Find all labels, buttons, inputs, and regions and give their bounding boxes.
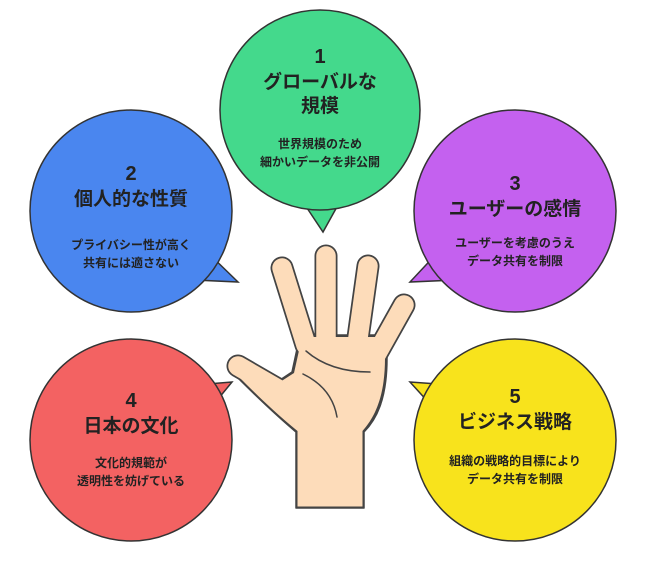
- bubble 4: Japanese culture: [30, 339, 232, 541]
- bubble 3: user sentiment: [410, 110, 616, 312]
- bubble 4: Japanese culture: 日本の文化: [83, 415, 179, 437]
- bubble 4: Japanese culture: 透明性を妨げている: [77, 473, 185, 488]
- icon: hand: [236, 256, 404, 508]
- bubble 1: global scale: グローバルな: [263, 70, 377, 93]
- bubble 2: personal nature: 2: [125, 163, 137, 185]
- bubble 5: business strategy: [410, 339, 616, 541]
- bubble 2: personal nature: プライバシー性が高く: [71, 237, 191, 252]
- bubble 1: global scale: [220, 10, 420, 232]
- bubble 1: global scale: 1: [314, 46, 326, 68]
- bubble 3: user sentiment: データ共有を制限: [467, 253, 563, 268]
- bubble 1: global scale: 細かいデータを非公開: [260, 154, 380, 169]
- bubble 5: business strategy: データ共有を制限: [467, 471, 563, 486]
- bubble 3: user sentiment: ユーザーを考慮のうえ: [455, 235, 575, 250]
- bubble 4: Japanese culture: 文化的規範が: [95, 455, 167, 470]
- bubble 2: personal nature: 個人的な性質: [74, 188, 188, 210]
- bubble 5: business strategy: ビジネス戦略: [458, 411, 572, 433]
- bubble 2: personal nature: [30, 110, 238, 312]
- bubble 3: user sentiment: ユーザーの感情: [449, 197, 581, 220]
- bubble 4: Japanese culture: 4: [125, 390, 137, 412]
- bubble 1: global scale: 規模: [301, 95, 339, 117]
- bubble 2: personal nature: 共有には適さない: [83, 255, 179, 270]
- bubble 5: business strategy: 5: [509, 386, 521, 408]
- bubble 5: business strategy: 組織の戦略的目標により: [449, 453, 581, 468]
- bubble 3: user sentiment: 3: [509, 173, 521, 195]
- bubble 1: global scale: 世界規模のため: [278, 136, 362, 151]
